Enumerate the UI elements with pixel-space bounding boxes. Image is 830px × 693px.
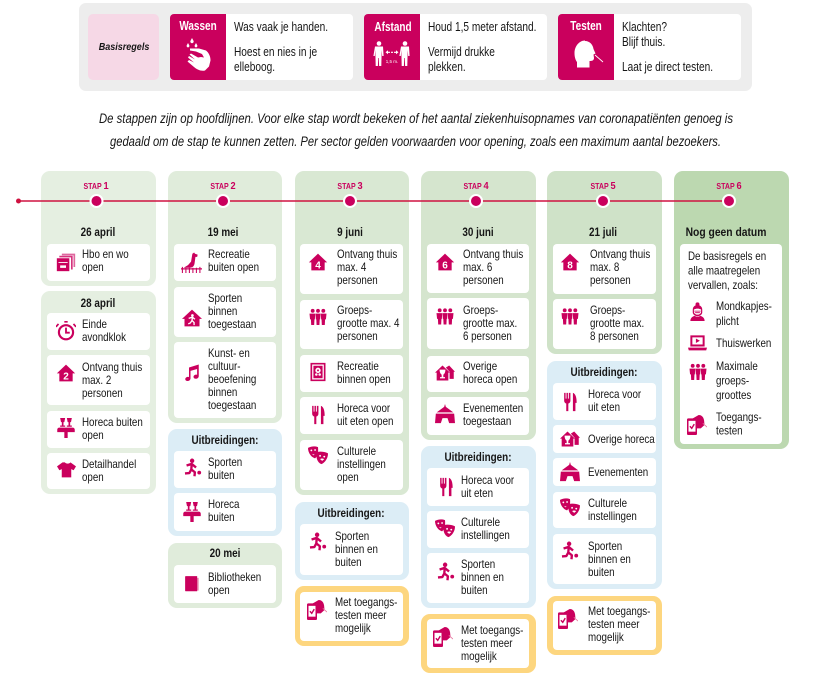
card: ontvang thuis 2: 2 bbox=[63, 372, 69, 382]
card: sporten binnen en buiten: binnen en bbox=[588, 553, 631, 566]
timeline node 4 bbox=[470, 195, 482, 207]
card: sporten binnen en buiten: binnen en bbox=[335, 543, 378, 556]
column: stap 6 bbox=[674, 171, 789, 449]
card: evenementen: Evenementen bbox=[463, 402, 523, 415]
card: kunst en cultuur bbox=[174, 342, 276, 418]
card: sporten buiten: buiten bbox=[208, 469, 235, 482]
panel: toegangstesten stap 3 bbox=[295, 586, 409, 646]
panel: uitbreidingen stap 5: Uitbreidingen: bbox=[571, 366, 637, 379]
card: horeca voor uit eten: Horeca voor bbox=[461, 474, 514, 487]
item: thuiswerken: Thuiswerken bbox=[716, 337, 771, 350]
card: ontvang thuis 6: max. 6 bbox=[463, 261, 492, 274]
rule: afstand: plekken. bbox=[428, 61, 466, 74]
card: groepsgrootte 4: personen bbox=[337, 330, 378, 343]
column: stap 2 bbox=[168, 171, 282, 608]
column: stap 5 bbox=[547, 171, 662, 655]
card: detailhandel: Detailhandel bbox=[82, 458, 136, 471]
card: ontvang thuis 6: Ontvang thuis bbox=[463, 248, 523, 261]
card: culturele instellingen: instellingen bbox=[337, 458, 386, 471]
panel: toegangstesten stap 5: Met toegangs- bbox=[588, 605, 650, 618]
column: stap 3 bbox=[295, 171, 409, 646]
intro text: De stappen zijn op hoofdlijnen. Voor elke stap wordt bekeken of het aantal ziekenhuisopnames van coronapatiënten genoeg is bbox=[99, 111, 733, 126]
card: horeca voor uit eten: uit eten open bbox=[337, 415, 394, 428]
rule: wassen: elleboog. bbox=[234, 61, 275, 74]
card: evenementen: toegestaan bbox=[463, 415, 511, 428]
card: groepsgrootte 4: Groeps- bbox=[337, 304, 372, 317]
item: maximale groepsgroottes: groeps- bbox=[716, 375, 750, 388]
card: bibliotheken bbox=[174, 565, 276, 603]
icon: washing hands bbox=[187, 38, 210, 71]
item: mondkapjesplicht: Mondkapjes- bbox=[716, 300, 772, 313]
item: mondkapjesplicht bbox=[690, 300, 772, 328]
panel: 19 mei bbox=[168, 171, 282, 423]
card: culturele instellingen: open bbox=[337, 471, 359, 484]
card: groepsgrootte 4 bbox=[300, 300, 403, 349]
panel: toegangstesten stap 4: testen meer bbox=[461, 637, 513, 650]
card: recreatie binnen bbox=[300, 355, 403, 392]
card: ontvang thuis 4 bbox=[300, 244, 403, 294]
card: detailhandel: open bbox=[82, 471, 104, 484]
card: overige horeca bbox=[427, 356, 529, 392]
panel: toegangstesten stap 5: testen meer bbox=[588, 618, 640, 631]
card: evenementen: Evenementen bbox=[588, 466, 648, 479]
card: ontvang thuis 8: Ontvang thuis bbox=[590, 248, 650, 261]
card: detailhandel bbox=[47, 453, 150, 489]
item: thuiswerken bbox=[688, 335, 771, 350]
panel: uitbreidingen stap 3 bbox=[295, 502, 409, 580]
panel: toegangstesten stap 3: mogelijk bbox=[335, 622, 371, 635]
card: kunst en cultuur: toegestaan bbox=[208, 399, 256, 412]
item: maximale groepsgroottes: groottes bbox=[716, 389, 751, 402]
card: sporten binnen en buiten: buiten bbox=[588, 566, 615, 579]
panel: 26 april bbox=[41, 171, 156, 286]
card: sporten binnen bbox=[174, 287, 276, 337]
card: culturele instellingen bbox=[553, 492, 656, 528]
card: sporten binnen en buiten bbox=[300, 524, 403, 575]
card: horeca voor uit eten bbox=[427, 468, 529, 506]
card: horeca buiten: open bbox=[82, 429, 104, 442]
card: groepsgrootte 6 bbox=[427, 298, 529, 349]
card: sporten binnen en buiten: buiten bbox=[461, 584, 488, 597]
panel: 26 april: 26 april bbox=[81, 226, 115, 239]
card: ontvang thuis 6: personen bbox=[463, 274, 504, 287]
card: culturele instellingen bbox=[427, 511, 529, 548]
icon: two people at distance bbox=[373, 41, 410, 66]
item: mondkapjesplicht: plicht bbox=[716, 315, 739, 328]
card: horeca voor uit eten bbox=[553, 383, 656, 420]
panel: 21 juli: 21 juli bbox=[589, 226, 617, 239]
panel: 20 mei bbox=[168, 543, 282, 608]
card: ontvang thuis 4: max. 4 bbox=[337, 261, 366, 274]
panel: uitbreidingen stap 4 bbox=[421, 446, 536, 608]
card: groepsgrootte 8 bbox=[553, 299, 656, 349]
card: sporten binnen: toegestaan bbox=[208, 318, 256, 331]
card: culturele instellingen: Culturele bbox=[588, 497, 627, 510]
panel: 9 juni bbox=[295, 171, 409, 495]
panel: nog geen datum: STAP 6 bbox=[716, 181, 742, 192]
card: recreatie binnen: Recreatie bbox=[337, 360, 379, 373]
card: sporten binnen en buiten: buiten bbox=[335, 556, 362, 569]
panel: toegangstesten stap 5 bbox=[547, 596, 662, 655]
card: einde avondklok: avondklok bbox=[82, 331, 127, 344]
card: ontvang thuis 4: personen bbox=[337, 274, 378, 287]
card: ontvang thuis 6: 6 bbox=[442, 260, 448, 272]
card: sporten binnen en buiten: binnen en bbox=[461, 571, 504, 584]
card: ontvang thuis 8: max. 8 bbox=[590, 261, 619, 274]
card: sporten binnen en buiten: Sporten bbox=[461, 558, 495, 571]
card: horeca buiten bbox=[174, 493, 276, 531]
card: einde avondklok bbox=[47, 313, 150, 350]
panel: basisregels bbox=[79, 3, 752, 91]
card: horeca buiten: buiten bbox=[208, 511, 235, 524]
card: bibliotheken: Bibliotheken bbox=[208, 571, 261, 584]
rule: testen: Testen bbox=[570, 20, 602, 33]
timeline bbox=[16, 195, 735, 207]
rule: wassen bbox=[170, 14, 353, 80]
card: kunst en cultuur: binnen bbox=[208, 386, 237, 399]
card: groepsgrootte 4: grootte max. 4 bbox=[337, 317, 399, 330]
panel: 21 juli bbox=[547, 171, 662, 354]
rule: afstand bbox=[364, 14, 547, 80]
card: recreatie buiten bbox=[174, 244, 276, 281]
panel: uitbreidingen stap 2: Uitbreidingen: bbox=[192, 434, 258, 447]
card: recreatie buiten: Recreatie bbox=[208, 248, 250, 261]
card: ontvang thuis 2: max. 2 bbox=[82, 374, 111, 387]
card: ontvang thuis 4: 4 bbox=[315, 260, 321, 272]
card: ontvang thuis 2 bbox=[47, 355, 150, 405]
intro text bbox=[99, 111, 733, 149]
rule: afstand: Houd 1,5 meter afstand. bbox=[428, 21, 536, 34]
card: culturele instellingen: instellingen bbox=[588, 510, 637, 523]
panel: 28 april: 28 april bbox=[81, 297, 115, 310]
timeline node 5 bbox=[597, 195, 609, 207]
icon: two people at distance: 1,5 m. bbox=[386, 59, 398, 64]
card: horeca voor uit eten: uit eten bbox=[588, 401, 620, 414]
card: bibliotheken: open bbox=[208, 584, 230, 597]
card: sporten binnen en buiten bbox=[427, 553, 529, 603]
panel: toegangstesten stap 4: Met toegangs- bbox=[461, 624, 523, 637]
item: toegangstesten bbox=[687, 411, 762, 438]
card: groepsgrootte 8: 8 personen bbox=[590, 330, 639, 343]
card: kunst en cultuur: beoefening bbox=[208, 373, 256, 386]
timeline node 6 bbox=[723, 195, 735, 207]
panel: 28 april bbox=[41, 291, 156, 494]
card: recreatie binnen: binnen open bbox=[337, 373, 391, 386]
card: groepsgrootte 6: 6 personen bbox=[463, 330, 512, 343]
card: maatregelen vervallen bbox=[680, 244, 782, 444]
column: stap 4 bbox=[421, 171, 536, 673]
card: maatregelen vervallen: alle maatregelen bbox=[688, 265, 760, 278]
basisregels label bbox=[88, 14, 159, 80]
card: hbo en wo: Hbo en wo bbox=[82, 248, 129, 261]
card: overige horeca: Overige horeca bbox=[588, 433, 655, 446]
rule: testen: Blijf thuis. bbox=[622, 36, 665, 49]
rule: wassen: Was vaak je handen. bbox=[234, 21, 328, 34]
rule: testen: Klachten? bbox=[622, 21, 667, 34]
panel: 9 juni: 9 juni bbox=[337, 226, 363, 239]
intro text: gedaald om de stap te kunnen zetten. Per sector gelden voorwaarden voor opening, zoals een maximum aantal bezoekers. bbox=[110, 134, 721, 149]
rule: wassen: Hoest en nies in je bbox=[234, 46, 317, 59]
rule: afstand: Afstand bbox=[374, 21, 412, 34]
card: overige horeca bbox=[553, 425, 656, 453]
card: horeca voor uit eten: uit eten bbox=[461, 487, 493, 500]
card: maatregelen vervallen: vervallen, zoals: bbox=[688, 279, 758, 292]
card: groepsgrootte 6: Groeps- bbox=[463, 304, 498, 317]
card: horeca voor uit eten bbox=[300, 397, 403, 434]
panel: toegangstesten stap 3: testen meer bbox=[335, 609, 387, 622]
card: kunst en cultuur: Kunst- en bbox=[208, 347, 250, 360]
panel: 9 juni: STAP 3 bbox=[337, 181, 363, 192]
panel: 30 juni: 30 juni bbox=[462, 226, 494, 239]
panel: toegangstesten stap 5: mogelijk bbox=[588, 631, 624, 644]
card: horeca buiten bbox=[47, 411, 150, 448]
timeline node 3 bbox=[344, 195, 356, 207]
rule: testen bbox=[558, 14, 741, 80]
timeline node 2 bbox=[217, 195, 229, 207]
column: stap 1 bbox=[41, 171, 156, 494]
panel: 20 mei: 20 mei bbox=[210, 547, 240, 560]
card: ontvang thuis 8: 8 bbox=[567, 260, 573, 272]
rule: testen: Laat je direct testen. bbox=[622, 61, 713, 74]
card: kunst en cultuur: cultuur- bbox=[208, 360, 241, 373]
card: ontvang thuis 8 bbox=[553, 244, 656, 294]
item: toegangstesten: Toegangs- bbox=[716, 411, 762, 424]
panel: uitbreidingen stap 4: Uitbreidingen: bbox=[445, 451, 511, 464]
card: groepsgrootte 6: grootte max. bbox=[463, 317, 517, 330]
card: horeca voor uit eten: Horeca voor bbox=[337, 402, 390, 415]
item: toegangstesten: testen bbox=[716, 425, 743, 438]
card: sporten buiten bbox=[174, 451, 276, 488]
card: einde avondklok: Einde bbox=[82, 318, 107, 331]
panel: toegangstesten stap 3: Met toegangs- bbox=[335, 596, 397, 609]
panel: uitbreidingen stap 2 bbox=[168, 429, 282, 536]
card: recreatie buiten: buiten open bbox=[208, 261, 259, 274]
rule: afstand: Vermijd drukke bbox=[428, 46, 495, 59]
card: overige horeca: Overige bbox=[463, 360, 497, 373]
card: evenementen bbox=[427, 397, 529, 435]
timeline node 1 bbox=[90, 195, 102, 207]
card: groepsgrootte 8: grootte max. bbox=[590, 317, 644, 330]
item: maximale groepsgroottes: Maximale bbox=[716, 360, 758, 373]
icon: head with swab bbox=[574, 40, 603, 68]
panel: toegangstesten stap 4 bbox=[421, 614, 536, 673]
panel: 30 juni bbox=[421, 171, 536, 440]
card: sporten binnen: binnen bbox=[208, 305, 237, 318]
card: sporten binnen en buiten bbox=[553, 534, 656, 584]
panel: 21 juli: STAP 5 bbox=[590, 181, 616, 192]
card: ontvang thuis 4: Ontvang thuis bbox=[337, 248, 397, 261]
panel: uitbreidingen stap 5 bbox=[547, 361, 662, 589]
panel: 19 mei: STAP 2 bbox=[210, 181, 236, 192]
card: groepsgrootte 8: Groeps- bbox=[590, 304, 625, 317]
card: hbo en wo bbox=[47, 244, 150, 281]
card: ontvang thuis 8: personen bbox=[590, 274, 631, 287]
card: culturele instellingen: instellingen bbox=[461, 529, 510, 542]
card: ontvang thuis 2: Ontvang thuis bbox=[82, 361, 142, 374]
card: culturele instellingen: Culturele bbox=[337, 445, 376, 458]
card: evenementen bbox=[553, 458, 656, 486]
rule: wassen: Wassen bbox=[179, 20, 217, 33]
card: culturele instellingen: Culturele bbox=[461, 516, 500, 529]
panel: nog geen datum: Nog geen datum bbox=[686, 226, 766, 239]
card: ontvang thuis 2: personen bbox=[82, 387, 123, 400]
card: ontvang thuis 6 bbox=[427, 244, 529, 293]
card: overige horeca: horeca open bbox=[463, 373, 517, 386]
card: sporten binnen en buiten: Sporten bbox=[335, 530, 369, 543]
card: maatregelen vervallen: De basisregels en bbox=[688, 250, 766, 263]
panel: uitbreidingen stap 3: Uitbreidingen: bbox=[318, 507, 384, 520]
panel: nog geen datum bbox=[674, 171, 789, 449]
card: culturele instellingen bbox=[300, 440, 403, 490]
card: sporten binnen: Sporten bbox=[208, 292, 242, 305]
panel: 19 mei: 19 mei bbox=[208, 226, 238, 239]
card: hbo en wo: open bbox=[82, 261, 104, 274]
card: sporten buiten: Sporten bbox=[208, 456, 242, 469]
card: horeca buiten: Horeca bbox=[208, 498, 239, 511]
panel: 30 juni: STAP 4 bbox=[463, 181, 489, 192]
panel: toegangstesten stap 4: mogelijk bbox=[461, 650, 497, 663]
item: maximale groepsgroottes bbox=[690, 360, 758, 402]
card: sporten binnen en buiten: Sporten bbox=[588, 540, 622, 553]
card: horeca buiten: Horeca buiten bbox=[82, 416, 143, 429]
card: horeca voor uit eten: Horeca voor bbox=[588, 388, 641, 401]
panel: 26 april: STAP 1 bbox=[83, 181, 109, 192]
basisregels label: Basisregels bbox=[99, 41, 150, 53]
